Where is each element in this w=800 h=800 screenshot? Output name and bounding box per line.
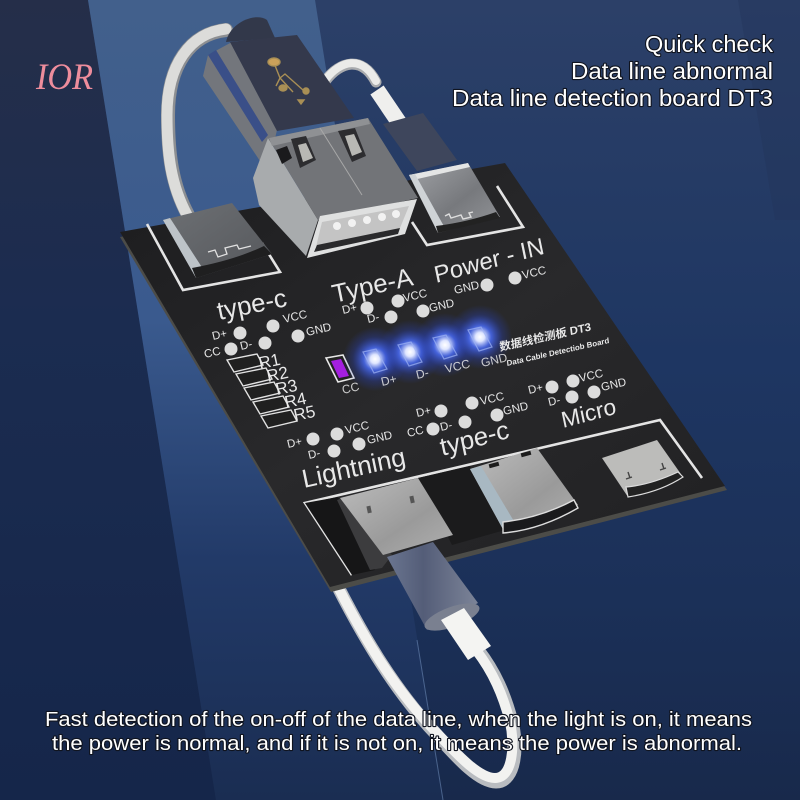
resistors R1 to R5 (227, 350, 317, 428)
pads: Lightning: GND (366, 429, 394, 447)
LED labels (341, 350, 509, 397)
LED glow: blue lights (343, 305, 512, 391)
board title: 数据线检测板 DT3 (499, 320, 592, 354)
cable: white right top cable (326, 63, 400, 124)
LED labels: D+ (380, 372, 398, 389)
connector: Type-C bottom socket (470, 448, 578, 533)
board title (499, 320, 610, 368)
pads: Lightning: D- (307, 447, 322, 462)
LED labels: CC (341, 379, 361, 397)
pads: Micro: GND (600, 376, 628, 394)
pads: Type-A: D+ (341, 302, 359, 317)
top right caption: Data line abnormal (571, 58, 773, 84)
pads: Power-IN: GND (453, 279, 481, 297)
silk heading: Type-A: Type-A (330, 263, 416, 309)
LED labels: VCC (444, 357, 472, 376)
resistors R1 to R5: R4 (283, 389, 308, 412)
bottom caption: Fast detection of the on-off of the data line, when the light is on, it means (45, 708, 752, 731)
connector: Type-C top left (163, 203, 272, 278)
top right caption: Data line detection board DT3 (452, 85, 773, 111)
pads: Micro: VCC (578, 368, 604, 385)
LED: CC purple (326, 355, 354, 382)
LED labels: D- (415, 365, 430, 382)
pads: Power-IN (453, 265, 547, 297)
silk heading: Lightning: Lightning (300, 443, 408, 494)
pads: Type-A: VCC (402, 288, 428, 305)
pads: type-c bottom: D- (439, 419, 454, 434)
pads: Type-A (341, 288, 456, 326)
pads: Micro (527, 368, 628, 409)
pads: Micro: D- (547, 394, 562, 409)
pads: type-c top: GND (305, 321, 333, 339)
resistors R1 to R5: R2 (265, 363, 290, 386)
icon: USB trident (268, 58, 309, 104)
connector: Micro socket (602, 440, 683, 497)
silk heading: Power - IN: Power - IN (432, 233, 547, 289)
silk heading: type-c top: type-c (215, 284, 289, 326)
bottom caption: the power is normal, and if it is not on, it means the power is abnormal. (52, 732, 742, 755)
pads: type-c bottom (406, 391, 530, 440)
cable: white left loop to top USB (167, 29, 226, 215)
pads: Lightning: D+ (286, 436, 304, 451)
resistors R1 to R5: R1 (257, 350, 282, 373)
pads: Type-A: D- (366, 311, 381, 326)
pads: type-c bottom: VCC (479, 391, 505, 408)
logo: IOR: IOR (35, 57, 93, 98)
connector: USB plug (203, 17, 354, 172)
top right caption: Quick check (645, 31, 774, 57)
top right caption (452, 31, 774, 111)
connector: USB-A metal socket (253, 118, 418, 258)
pads: type-c top: VCC (282, 309, 308, 326)
pads: type-c top: CC (203, 345, 222, 361)
pads: type-c top: D- (239, 338, 254, 353)
connector: Type-C top right (383, 113, 500, 233)
board (120, 163, 727, 592)
bottom caption (45, 708, 752, 755)
pads: type-c top: D+ (211, 328, 229, 343)
resistors R1 to R5: R3 (274, 376, 299, 399)
board title: Data Cable Detectiob Board (506, 336, 610, 368)
pads: Micro: D+ (527, 382, 545, 397)
cable: bottom loop (337, 585, 515, 782)
pads: Lightning (286, 420, 394, 462)
pads: type-c bottom: GND (502, 400, 530, 418)
pads: Type-A: GND (428, 297, 456, 315)
LED labels: GND (480, 350, 509, 370)
connector: Lightning on board (337, 478, 491, 660)
silk heading: type-c bottom: type-c (438, 416, 512, 462)
resistors R1 to R5: R5 (292, 402, 317, 425)
pads: type-c bottom: D+ (415, 405, 433, 420)
pads: Power-IN: VCC (521, 265, 547, 282)
silk heading: Micro: Micro (559, 393, 618, 433)
pads: Lightning: VCC (344, 420, 370, 437)
socket outlines (147, 186, 702, 575)
pads: type-c top (203, 309, 333, 361)
pads: type-c bottom: CC (406, 424, 425, 440)
